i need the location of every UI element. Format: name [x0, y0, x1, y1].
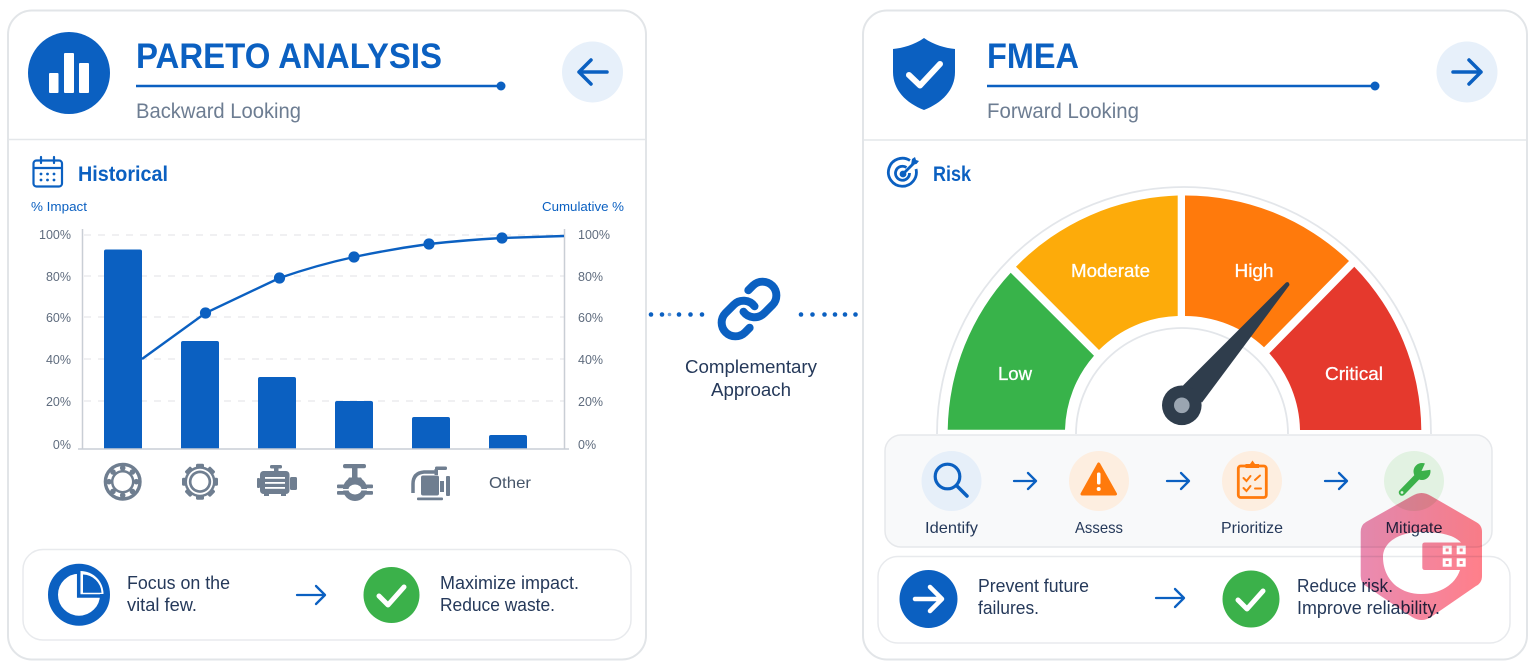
axis title: Cumulative %: Cumulative % — [542, 199, 624, 214]
callout: Pareto takeaway — [23, 550, 631, 640]
text: focus on the vital few — [127, 573, 230, 615]
panel: process steps — [885, 435, 1492, 547]
arrow — [1156, 589, 1184, 607]
segment: Critical: Critical — [1325, 364, 1383, 384]
arrow — [1325, 473, 1347, 489]
segment: Moderate — [1016, 196, 1178, 350]
icon: motor — [257, 465, 297, 496]
icon: valve — [337, 464, 373, 501]
segment: Critical — [1269, 267, 1421, 430]
icon: back arrow — [562, 42, 623, 102]
segment: Low — [948, 273, 1094, 430]
step: Mitigate: Mitigate — [1386, 520, 1443, 537]
icon: target — [888, 157, 919, 186]
left axis labels: 40% — [46, 353, 71, 367]
label: complementary approach: Approach — [711, 380, 791, 400]
step: Prioritize — [1221, 451, 1283, 537]
icon: blue arrow badge — [900, 570, 958, 628]
subtitle: Backward Looking: Backward Looking — [136, 100, 301, 123]
right axis labels: 80% — [578, 270, 603, 284]
right axis labels: 0% — [578, 438, 596, 452]
segment: High: High — [1234, 261, 1274, 281]
icon: chain link — [722, 282, 776, 336]
icon: shield check — [893, 38, 955, 110]
text: maximize impact: Maximize impact. — [440, 573, 579, 593]
step: Assess — [1069, 451, 1129, 537]
panel: Pareto analysis — [8, 10, 646, 660]
icon: bearing — [105, 464, 140, 499]
gauge — [937, 187, 1431, 434]
pareto chart — [31, 199, 624, 452]
watermark badge — [1361, 493, 1482, 620]
panel: FMEA — [863, 10, 1527, 660]
title underline — [136, 82, 506, 90]
label: complementary approach — [685, 357, 817, 400]
subtitle: Forward Looking: Forward Looking — [987, 100, 1139, 123]
step: Identify: Identify — [925, 520, 978, 537]
cumulative line — [142, 232, 564, 359]
text: prevent future failures: failures. — [978, 598, 1039, 618]
left axis labels: 80% — [46, 270, 71, 284]
icon: gear — [182, 464, 218, 500]
heading: Risk: Risk — [933, 163, 971, 186]
arrow — [297, 586, 325, 604]
icon: pump — [413, 466, 450, 500]
text: reduce risk — [1297, 576, 1440, 618]
right axis labels: 20% — [578, 395, 603, 409]
left axis labels: 20% — [46, 395, 71, 409]
bars — [104, 250, 527, 451]
text: reduce risk: Improve reliability. — [1297, 598, 1440, 618]
right axis labels: 100% — [578, 228, 610, 242]
dotted connector left — [649, 312, 704, 317]
segment: Moderate: Moderate — [1071, 261, 1150, 281]
icon: bar chart badge — [28, 32, 110, 114]
title underline — [987, 82, 1380, 90]
right axis labels: 40% — [578, 353, 603, 367]
text: maximize impact — [440, 573, 579, 615]
step: Identify — [922, 451, 982, 537]
axis title: % Impact: % Impact — [31, 199, 87, 214]
icon: forward arrow — [1436, 42, 1498, 102]
heading: Pareto Analysis: PARETO ANALYSIS — [136, 37, 442, 76]
left axis labels: 100% — [39, 228, 71, 242]
label: complementary approach: Complementary — [685, 357, 817, 377]
text: prevent future failures — [978, 576, 1089, 618]
left axis labels — [39, 228, 71, 452]
icon: calendar — [34, 157, 62, 186]
segment: High — [1185, 195, 1349, 347]
text: prevent future failures: Prevent future — [978, 576, 1089, 596]
heading: FMEA: FMEA — [987, 37, 1079, 76]
text: reduce risk: Reduce risk. — [1297, 576, 1393, 596]
arrow — [1167, 473, 1189, 489]
gauge needle — [1162, 282, 1290, 425]
callout: FMEA takeaway — [878, 556, 1510, 643]
step: Mitigate — [1384, 451, 1444, 537]
left axis labels: 60% — [46, 311, 71, 325]
right axis labels — [578, 228, 610, 452]
text: focus on the vital few: Focus on the — [127, 573, 230, 593]
icon: pie chart — [53, 569, 105, 621]
text: focus on the vital few: vital few. — [127, 595, 197, 615]
text: maximize impact: Reduce waste. — [440, 595, 555, 615]
heading: Historical: Historical — [78, 163, 168, 186]
connector: complementary approach — [649, 282, 858, 400]
step: Prioritize: Prioritize — [1221, 520, 1283, 537]
step: Assess: Assess — [1075, 520, 1123, 537]
left axis labels: 0% — [53, 438, 71, 452]
arrow — [1014, 473, 1036, 489]
dotted connector right — [799, 312, 858, 317]
right axis labels: 60% — [578, 311, 603, 325]
icon: green check — [364, 567, 420, 623]
icon: green check — [1222, 570, 1280, 628]
segment: Low: Low — [998, 364, 1033, 384]
label: Other: Other — [489, 475, 532, 492]
